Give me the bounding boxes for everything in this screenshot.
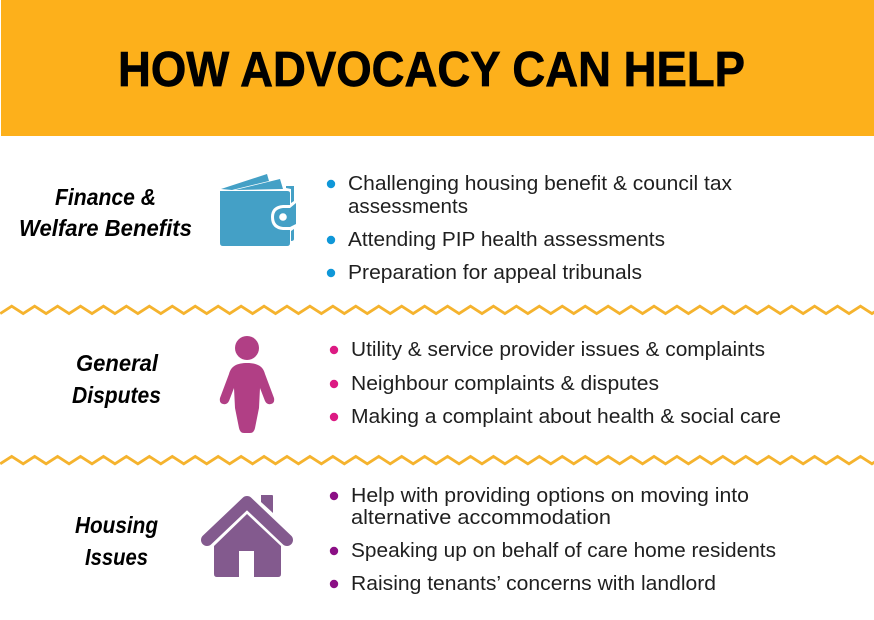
list: finance: Challenging housing benefit & council tax xyxy=(348,172,733,195)
heading: finance: Finance & xyxy=(55,184,156,210)
title: HOW ADVOCACY CAN HELP xyxy=(118,43,745,97)
icon: wallet xyxy=(220,174,296,246)
heading: finance: Welfare Benefits xyxy=(19,215,192,241)
panel: finance and welfare benefits xyxy=(19,172,733,284)
panel: general disputes xyxy=(72,336,781,433)
list: disputes: Neighbour complaints & disputes xyxy=(351,372,659,395)
heading: housing: Housing xyxy=(75,512,158,538)
list: housing: alternative accommodation xyxy=(351,506,611,529)
list: finance xyxy=(327,172,733,284)
list: disputes: Making a complaint about health & social care xyxy=(351,405,781,428)
heading: housing: Issues xyxy=(85,544,148,570)
icon: house xyxy=(207,495,287,577)
list: finance: Attending PIP health assessments xyxy=(348,228,665,251)
list: housing: Speaking up on behalf of care home residents xyxy=(351,539,776,562)
list: housing xyxy=(330,484,776,595)
divider: zigzag bottom xyxy=(0,456,874,464)
divider: zigzag top xyxy=(0,306,874,314)
panel: housing issues xyxy=(75,484,776,595)
header banner xyxy=(1,0,874,136)
list: disputes xyxy=(330,338,781,428)
list: disputes: Utility & service provider issues & complaints xyxy=(351,338,765,361)
heading: finance xyxy=(19,184,192,241)
heading: housing xyxy=(75,512,158,570)
heading: disputes: Disputes xyxy=(72,382,161,408)
list: housing: Help with providing options on moving into xyxy=(351,484,749,507)
heading: disputes xyxy=(72,350,161,408)
list: finance: assessments xyxy=(348,195,468,218)
list: finance: Preparation for appeal tribunals xyxy=(348,261,642,284)
heading: disputes: General xyxy=(76,350,159,376)
icon: person xyxy=(220,336,274,433)
list: housing: Raising tenants’ concerns with landlord xyxy=(351,572,716,595)
